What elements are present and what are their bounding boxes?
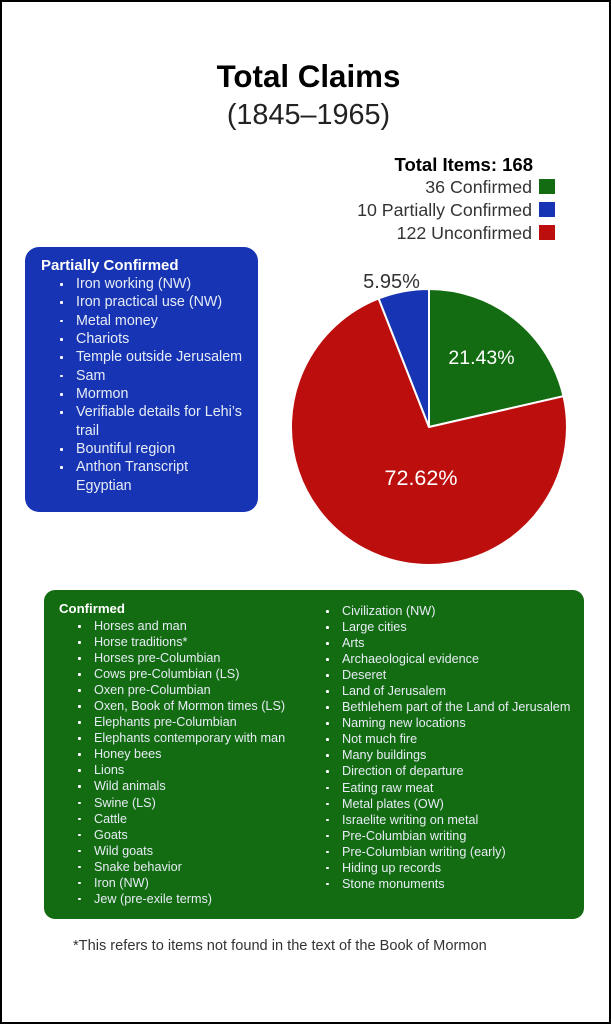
partially confirmed list: Temple outside Jerusalem — [76, 349, 242, 365]
confirmed list: left column: Oxen, Book of Mormon times (LS) — [94, 699, 285, 713]
pie chart — [292, 271, 566, 564]
legend heading: Total Items: 168 — [395, 154, 533, 175]
confirmed list: left column: Goats — [94, 828, 128, 842]
title: Total Claims — [217, 59, 400, 94]
footnote: *This refers to items not found in the text of the Book of Mormon — [73, 938, 487, 954]
confirmed list: left column — [78, 619, 285, 906]
label: 72.62%: 72.62% — [385, 466, 457, 490]
partially confirmed list: Chariots — [76, 331, 129, 347]
confirmed list: right column: Pre-Columbian writing (early) — [342, 845, 506, 859]
confirmed list: right column: Hiding up records — [342, 861, 441, 875]
confirmed list: right column: Archaeological evidence — [342, 652, 479, 666]
confirmed list: right column: Naming new locations — [342, 716, 466, 730]
confirmed list: right column: Eating raw meat — [342, 781, 433, 795]
confirmed list: left column: Oxen pre-Columbian — [94, 683, 211, 697]
partially confirmed list: Verifiable details for Lehi’s — [76, 404, 242, 420]
label: 21.43%: 21.43% — [448, 347, 515, 369]
confirmed list: left column: Lions — [94, 763, 124, 777]
partially confirmed list: Bountiful region — [76, 441, 175, 457]
label: 5.95%: 5.95% — [363, 271, 420, 293]
confirmed list: right column: Not much fire — [342, 732, 417, 746]
panel heading: Confirmed — [59, 601, 125, 616]
partially confirmed list: Iron working (NW) — [76, 276, 191, 292]
partially confirmed list: trail — [76, 423, 99, 439]
partially confirmed list: Egyptian — [76, 478, 132, 494]
partially confirmed list: Metal money — [76, 313, 158, 329]
confirmed list: left column: Horse traditions* — [94, 635, 187, 649]
confirmed list: left column: Elephants contemporary with man — [94, 731, 285, 745]
legend item: unconfirmed: 122 Unconfirmed — [397, 223, 532, 243]
partially confirmed list: Sam — [76, 368, 105, 384]
confirmed list: right column: Arts — [342, 636, 364, 650]
legend item: confirmed: 36 Confirmed — [425, 177, 532, 197]
panel: partially confirmed — [25, 247, 258, 512]
slice: confirmed 21.43% — [429, 289, 564, 427]
confirmed list: left column: Honey bees — [94, 747, 161, 761]
confirmed list: right column: Land of Jerusalem — [342, 684, 446, 698]
confirmed list: left column: Jew (pre-exile terms) — [94, 892, 212, 906]
partially confirmed list: Anthon Transcript — [76, 459, 188, 475]
legend — [357, 154, 555, 243]
confirmed list: left column: Horses and man — [94, 619, 187, 633]
confirmed list: left column: Wild animals — [94, 779, 166, 793]
confirmed list: right column: Israelite writing on metal — [342, 813, 478, 827]
confirmed list: right column: Civilization (NW) — [342, 604, 435, 618]
confirmed list: left column: Cows pre-Columbian (LS) — [94, 667, 239, 681]
confirmed list: right column: Deseret — [342, 668, 386, 682]
confirmed list: left column: Cattle — [94, 812, 127, 826]
confirmed list: left column: Wild goats — [94, 844, 153, 858]
partially confirmed list: Mormon — [76, 386, 128, 402]
confirmed list: left column: Iron (NW) — [94, 876, 149, 890]
confirmed list: right column: Pre-Columbian writing — [342, 829, 466, 843]
confirmed list: right column: Direction of departure — [342, 764, 464, 778]
confirmed list: left column: Snake behavior — [94, 860, 182, 874]
confirmed list: right column: Stone monuments — [342, 877, 445, 891]
confirmed list: right column: Bethlehem part of the Land of Jerusalem — [342, 700, 570, 714]
confirmed list: right column — [326, 604, 570, 891]
confirmed list: left column: Swine (LS) — [94, 796, 156, 810]
slice: partially confirmed 5.95% — [379, 289, 429, 427]
legend item: partially confirmed: 10 Partially Confirmed — [357, 200, 532, 220]
confirmed list: right column: Large cities — [342, 620, 407, 634]
slice: unconfirmed 72.62% — [291, 298, 567, 565]
confirmed list: left column: Horses pre-Columbian — [94, 651, 220, 665]
confirmed list: right column: Many buildings — [342, 748, 426, 762]
partially confirmed list: Iron practical use (NW) — [76, 294, 222, 310]
partially confirmed list — [60, 276, 242, 494]
panel: confirmed — [44, 590, 584, 919]
confirmed list: left column: Elephants pre-Columbian — [94, 715, 237, 729]
panel heading: Partially Confirmed — [41, 257, 179, 274]
confirmed list: right column: Metal plates (OW) — [342, 797, 444, 811]
subtitle: date range: (1845–1965) — [227, 99, 390, 131]
